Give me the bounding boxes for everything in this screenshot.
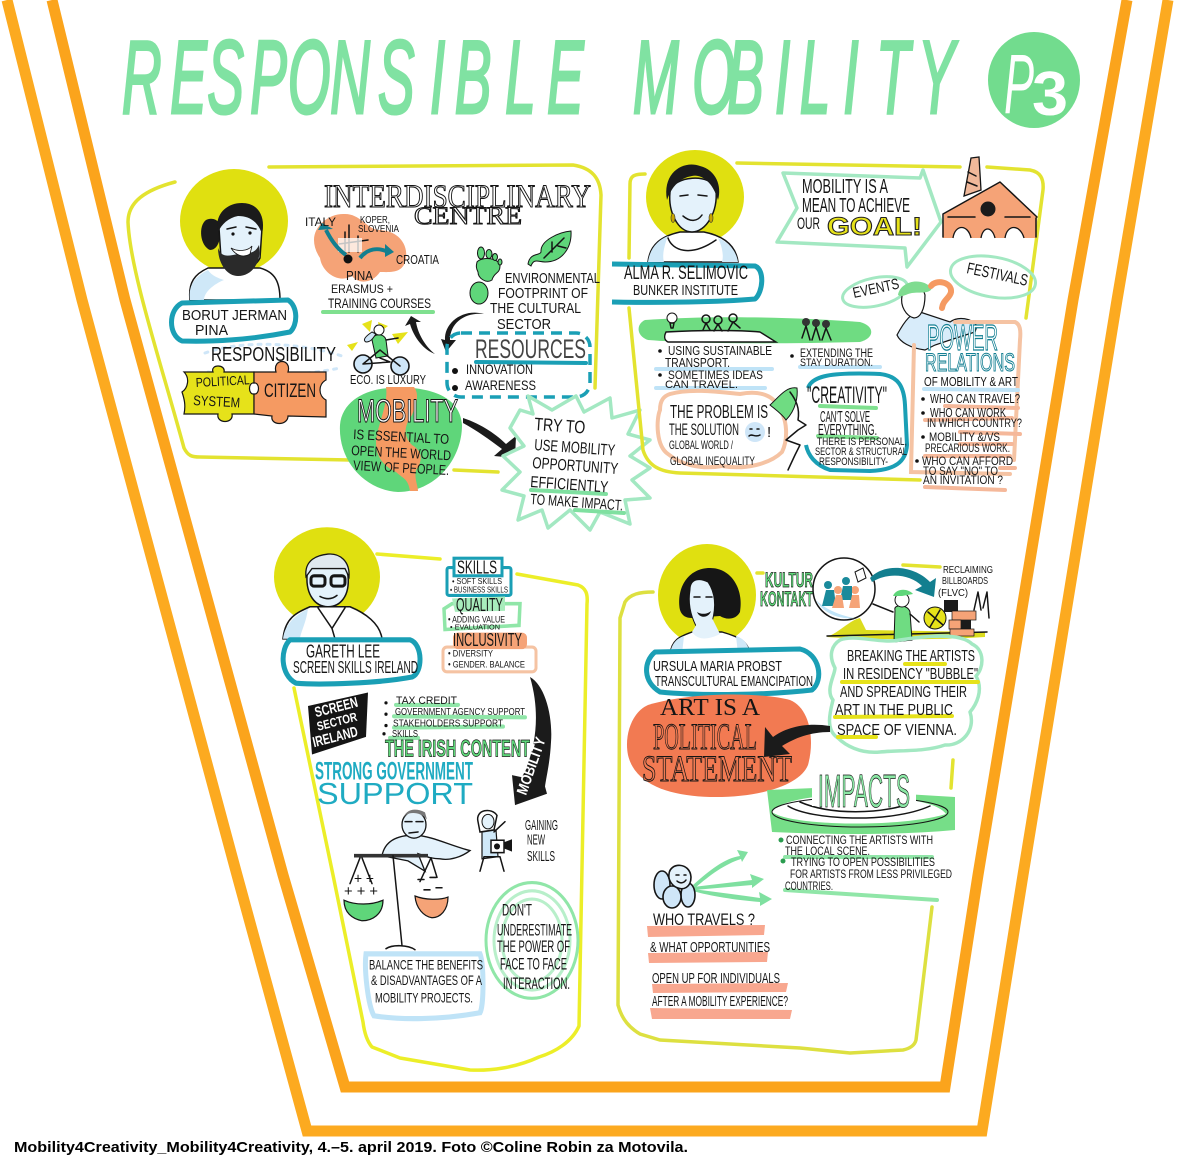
- text: gaining new skills: SKILLS: [527, 849, 555, 865]
- text: training courses: [323, 282, 433, 312]
- icon: bubble with artists: [813, 558, 875, 620]
- callout: creativity: RESPONSIBILITY-: [819, 456, 888, 468]
- stack: skills: • SOFT SKILLS: [452, 577, 503, 586]
- heading: responsibility: RESPONSIBILITY: [211, 344, 336, 366]
- callout: starburst try to use: [502, 396, 650, 530]
- callout: face to face: FACE TO FACE: [500, 955, 567, 973]
- arrow callout: mean to achieve goal: [777, 170, 941, 267]
- text: impacts bullets: COUNTRIES.: [785, 879, 833, 893]
- callout: creativity: EVERYTHING.: [818, 422, 877, 439]
- cloud: the problem is the solution: THE SOLUTION: [669, 420, 739, 439]
- panel: power relations: TO SAY "NO" TO: [923, 464, 998, 478]
- arrow: footprint to resources: [441, 313, 484, 352]
- callout: creativity: CAN'T SOLVE: [820, 409, 870, 426]
- panel: power relations: [911, 317, 1022, 490]
- callout: creativity: THERE IS PERSONAL,: [817, 436, 907, 448]
- icon: balance person with scales: + + +: [344, 884, 378, 900]
- impacts pond: [767, 765, 955, 834]
- globe: mobility statement: OPEN THE WORLD: [351, 442, 452, 463]
- callout: starburst try to use: TO MAKE IMPACT.: [530, 491, 624, 514]
- icon: balance person with scales: [344, 810, 470, 950]
- box: balance the benefits: & DISADVANTAGES OF A: [371, 973, 482, 988]
- stack: quality: [444, 594, 520, 632]
- stack: skills: SKILLS: [457, 556, 497, 578]
- text: impacts bullets: CONNECTING THE ARTISTS WITH: [786, 833, 933, 847]
- stack: inclusivity: INCLUSIVITY: [453, 629, 522, 650]
- callout: art is a political statement: STATEMENT: [642, 749, 792, 790]
- globe: mobility statement: VIEW OF PEOPLE.: [353, 457, 450, 478]
- arrow: mobility to callout: [463, 418, 516, 458]
- text: irish context bullets: SKILLS: [392, 729, 418, 740]
- map: Pina routes: CROATIA: [396, 252, 439, 267]
- arrow: resources to training: [405, 316, 435, 354]
- text: sustainable transport bullets: [656, 343, 880, 391]
- icon: person with camera: [478, 810, 512, 871]
- heading: strong government support: SUPPORT: [317, 777, 473, 811]
- text: who travels question: [647, 910, 792, 1019]
- callout: starburst try to use: USE MOBILITY: [534, 437, 616, 460]
- text: irish context bullets: [382, 695, 525, 740]
- label: events: [840, 271, 910, 313]
- heading: interdisciplinary centre: CENTRE: [414, 203, 522, 230]
- globe: mobility statement: [340, 387, 462, 492]
- text: sustainable transport bullets: CAN TRAVEL.: [665, 379, 738, 391]
- icon: factory building: [943, 157, 1037, 238]
- stack: quality: QUALITY: [456, 594, 503, 615]
- puzzle: political system and citizen: SYSTEM: [193, 392, 241, 410]
- arrow: reclaiming billboards: [870, 568, 936, 597]
- name box: Ursula: TRANSCULTURAL EMANCIPATION: [655, 673, 813, 690]
- stack: inclusivity: [443, 629, 536, 672]
- name box: Borut: BORUT JERMAN: [182, 307, 287, 324]
- puzzle: political system and citizen: CITIZEN: [264, 381, 316, 402]
- text: environmental footprint: THE CULTURAL: [490, 300, 581, 317]
- panel: power relations: WHO CAN TRAVEL?: [930, 391, 1020, 406]
- name box: Gareth: [283, 640, 420, 684]
- logo: kultur kontakt: KULTUR: [765, 569, 813, 592]
- cloud: the problem is the solution: GLOBAL WORLD /: [669, 438, 733, 452]
- callout: face to face: DON'T: [502, 901, 532, 920]
- panel: Alma R. Selimovic: [612, 150, 1043, 490]
- text: sustainable transport bullets: TRANSPORT.: [665, 355, 730, 370]
- text: irish context bullets: TAX CREDIT: [396, 695, 457, 707]
- panel 3 content: [274, 527, 578, 1019]
- stack: inclusivity: • GENDER. BALANCE: [448, 660, 525, 670]
- panel: power relations: IN WHICH COUNTRY?: [927, 416, 1022, 430]
- box: balance the benefits: BALANCE THE BENEFITS: [369, 957, 483, 972]
- text: gaining new skills: NEW: [527, 832, 545, 848]
- name box: Alma: ALMA R. SELIMOVIC: [624, 263, 748, 284]
- text: sustainable transport bullets: EXTENDING THE: [800, 348, 873, 360]
- portrait: Borut: [180, 169, 288, 300]
- puzzle: political system and citizen: POLITICAL: [195, 372, 250, 390]
- callout: creativity: SECTOR & STRUCTURAL: [815, 446, 907, 458]
- callout: face to face: INTERACTION.: [503, 975, 570, 993]
- icon: cyclist: ECO. IS LUXURY: [350, 372, 426, 387]
- text: sustainable transport bullets: USING SUSTAINABLE: [668, 343, 772, 358]
- text: environmental footprint: FOOTPRINT OF: [498, 285, 588, 302]
- title: RESPONSIBLE: [122, 19, 585, 135]
- logo: kultur kontakt: KONTAKT: [760, 588, 813, 611]
- icon: leaf and footprint: [470, 231, 571, 304]
- label: events: EVENTS: [851, 276, 901, 302]
- map: Pina routes: ITALY: [305, 215, 336, 229]
- text: environmental footprint: ENVIRONMENTAL: [505, 270, 600, 287]
- puzzle: political system and citizen: [182, 362, 326, 424]
- callout: face to face: THE POWER OF: [497, 938, 570, 956]
- box: balance the benefits: [365, 954, 483, 1019]
- map: Pina routes: [305, 214, 439, 283]
- box: balance the benefits: MOBILITY PROJECTS.: [375, 990, 473, 1005]
- arrow: mobility: MOBILITY: [514, 735, 550, 797]
- map: Pina routes: KOPER,: [360, 215, 390, 226]
- name box: Ursula: [647, 649, 819, 694]
- callout: starburst try to use: TRY TO: [534, 414, 586, 438]
- callout: creativity: "CREATIVITY": [807, 382, 887, 409]
- stack: skills: • BUSINESS SKILLS: [450, 585, 508, 594]
- panel: Borut Jerman Pina: [128, 165, 650, 530]
- green band: sustainable transport icons: [639, 313, 871, 343]
- portrait: Ursula: [658, 544, 756, 654]
- name box: Gareth: SCREEN SKILLS IRELAND: [293, 657, 418, 677]
- cloud: breaking the bubble: AND SPREADING THEIR: [840, 684, 967, 701]
- panel: power relations: MOBILITY &/VS: [929, 430, 1000, 444]
- icon: profile faces: [770, 388, 806, 470]
- panel 2 frame: [629, 163, 1043, 480]
- arrow: bubble to statement: [764, 725, 830, 757]
- text: environmental footprint: [490, 270, 600, 333]
- name box: Alma: BUNKER INSTITUTE: [633, 282, 738, 299]
- text: sustainable transport bullets: STAY DURATION.: [800, 357, 873, 369]
- cloud: breaking the bubble: BREAKING THE ARTISTS: [847, 648, 975, 665]
- icon: thinking person: [897, 282, 977, 350]
- portrait: Gareth: [274, 527, 382, 639]
- cloud: breaking the bubble: ART IN THE PUBLIC: [835, 702, 953, 719]
- panel: power relations: AN INVITATION ?: [923, 473, 1003, 487]
- text: sustainable transport bullets: SOMETIMES IDEAS: [668, 368, 763, 382]
- stack: quality: • ADDING VALUE: [448, 614, 505, 624]
- text: training courses: TRAINING COURSES: [328, 295, 431, 311]
- cloud: breaking the bubble: [830, 636, 982, 752]
- text: irish context bullets: GOVERNMENT AGENCY SUPPORT: [395, 707, 525, 718]
- callout: art is a political statement: ART IS A: [660, 695, 761, 721]
- callout: face to face: UNDERESTIMATE: [497, 921, 572, 939]
- text: training courses: ERASMUS +: [331, 282, 393, 296]
- badge: P3: P: [1004, 37, 1034, 131]
- cloud: the problem is the solution: THE PROBLEM IS: [670, 402, 768, 422]
- heading: interdisciplinary centre: INTERDISCIPLINARY: [324, 179, 591, 215]
- callout: creativity: [806, 374, 907, 471]
- map: Pina routes: SLOVENIA: [358, 224, 399, 235]
- badge: P3: [988, 32, 1080, 131]
- badge: P3: 3: [1032, 60, 1068, 129]
- text: impacts bullets: [778, 833, 952, 900]
- panel 3 frame: [294, 554, 587, 1070]
- stack: quality: • EVALUATION: [450, 622, 500, 632]
- globe: mobility statement: IS ESSENTIAL TO: [353, 426, 450, 447]
- heading: responsibility: [205, 344, 342, 375]
- panel: Gareth Lee: [274, 527, 587, 1070]
- text: impacts bullets: FOR ARTISTS FROM LESS PRIVILEGED: [790, 867, 952, 881]
- cloud: breaking the bubble: IN RESIDENCY "BUBBLE": [843, 666, 978, 683]
- portrait: Alma: [646, 150, 744, 262]
- panel: power relations: WHO CAN WORK: [930, 405, 1006, 420]
- panel: power relations: RELATIONS: [925, 349, 1015, 377]
- map: Pina routes: PINA: [346, 268, 373, 283]
- title: [122, 19, 958, 135]
- logo: kultur kontakt: [760, 569, 813, 611]
- name box: Borut: PINA: [195, 322, 228, 339]
- text: impacts bullets: THE LOCAL SCENE.: [785, 844, 870, 858]
- text: gaining new skills: [525, 818, 558, 865]
- logo: screen sector ireland: [308, 693, 368, 754]
- cloud: the problem is the solution: GLOBAL INEQUALITY: [670, 454, 755, 468]
- callout: resources: RESOURCES: [475, 334, 586, 364]
- scene: street art figure and bricks: [827, 590, 989, 642]
- icon: balance person with scales: + +: [354, 871, 374, 888]
- callout: resources: AWARENESS: [465, 377, 536, 393]
- callout: starburst try to use: EFFICIENTLY: [530, 474, 609, 496]
- panel: power relations: WHO CAN AFFORD: [922, 454, 1013, 468]
- arrow: mobility: [512, 677, 551, 805]
- text: who travels question: WHO TRAVELS ?: [653, 910, 755, 929]
- title: MOBILITY: [633, 19, 958, 135]
- name box: Ursula: URSULA MARIA PROBST: [653, 658, 782, 675]
- arrow callout: mean to achieve goal: MEAN TO ACHIEVE: [802, 195, 910, 217]
- text: environmental footprint: SECTOR: [497, 316, 551, 333]
- cloud: the problem is the solution: [658, 391, 786, 468]
- stack: skills: [447, 556, 511, 595]
- photo credit caption: Mobility4Creativity_Mobility4Creativity, 4.–5. april 2019. Foto ©Coline Robin za Motovila.: [14, 1139, 688, 1156]
- text: reclaiming billboards: BILLBOARDS: [942, 575, 988, 587]
- label: festivals: FESTIVALS: [965, 260, 1029, 290]
- text: who travels question: AFTER A MOBILITY EXPERIENCE?: [652, 993, 788, 1010]
- panel: power relations: OF MOBILITY & ART: [924, 374, 1018, 389]
- impacts pond: IMPACTS: [818, 765, 910, 817]
- icon: cyclist: [347, 320, 426, 387]
- text: who travels question: & WHAT OPPORTUNITIES: [650, 939, 770, 956]
- text: reclaiming billboards: (FLVC): [938, 587, 968, 599]
- text: irish context bullets: STAKEHOLDERS SUPPORT: [393, 718, 503, 730]
- text: gaining new skills: GAINING: [525, 818, 558, 834]
- heading: strong government support: [315, 758, 473, 811]
- text: reclaiming billboards: RECLAIMING: [943, 564, 993, 576]
- cloud: the problem is the solution: !: [767, 424, 771, 441]
- logo: screen sector ireland: SCREEN: [313, 694, 360, 721]
- text: reclaiming billboards: [938, 564, 993, 599]
- arrow callout: mean to achieve goal: OUR: [797, 214, 820, 233]
- heading: interdisciplinary centre: [324, 179, 591, 230]
- callout: resources: [447, 333, 590, 397]
- callout: art is a political statement: [627, 695, 811, 797]
- name box: Gareth: GARETH LEE: [306, 640, 380, 661]
- logo: screen sector ireland: IRELAND: [311, 724, 360, 751]
- heading: strong government support: STRONG GOVERNMENT: [315, 758, 473, 785]
- globe: mobility statement: MOBILITY: [357, 393, 458, 429]
- panel 1 frame: [128, 165, 601, 472]
- panel: power relations: POWER: [927, 317, 998, 358]
- name box: Alma: [612, 263, 762, 302]
- stack: inclusivity: • DIVERSITY: [448, 648, 493, 658]
- icon: travellers with arrows: [654, 850, 772, 908]
- callout: resources: INNOVATION: [466, 361, 533, 377]
- heading: the irish content: THE IRISH CONTENT: [385, 735, 530, 762]
- panel: power relations: PRECARIOUS WORK.: [925, 441, 1010, 455]
- panel: Ursula Maria Probst: [618, 544, 993, 1053]
- label: festivals: [947, 250, 1039, 304]
- cloud: breaking the bubble: SPACE OF VIENNA.: [837, 722, 957, 739]
- callout: starburst try to use: OPPORTUNITY: [532, 455, 619, 478]
- text: who travels question: OPEN UP FOR INDIVIDUALS: [652, 970, 780, 987]
- callout: art is a political statement: POLITICAL: [653, 717, 757, 758]
- arrow callout: mean to achieve goal: GOAL!: [827, 213, 922, 241]
- logo: screen sector ireland: SECTOR: [315, 710, 359, 734]
- name box: Borut: [172, 300, 296, 341]
- callout: face to face: [486, 883, 578, 998]
- arrow callout: mean to achieve goal: MOBILITY IS A: [802, 176, 888, 198]
- text: impacts bullets: TRYING TO OPEN POSSIBILITIES: [791, 855, 935, 869]
- panel 4 frame: [618, 565, 953, 1053]
